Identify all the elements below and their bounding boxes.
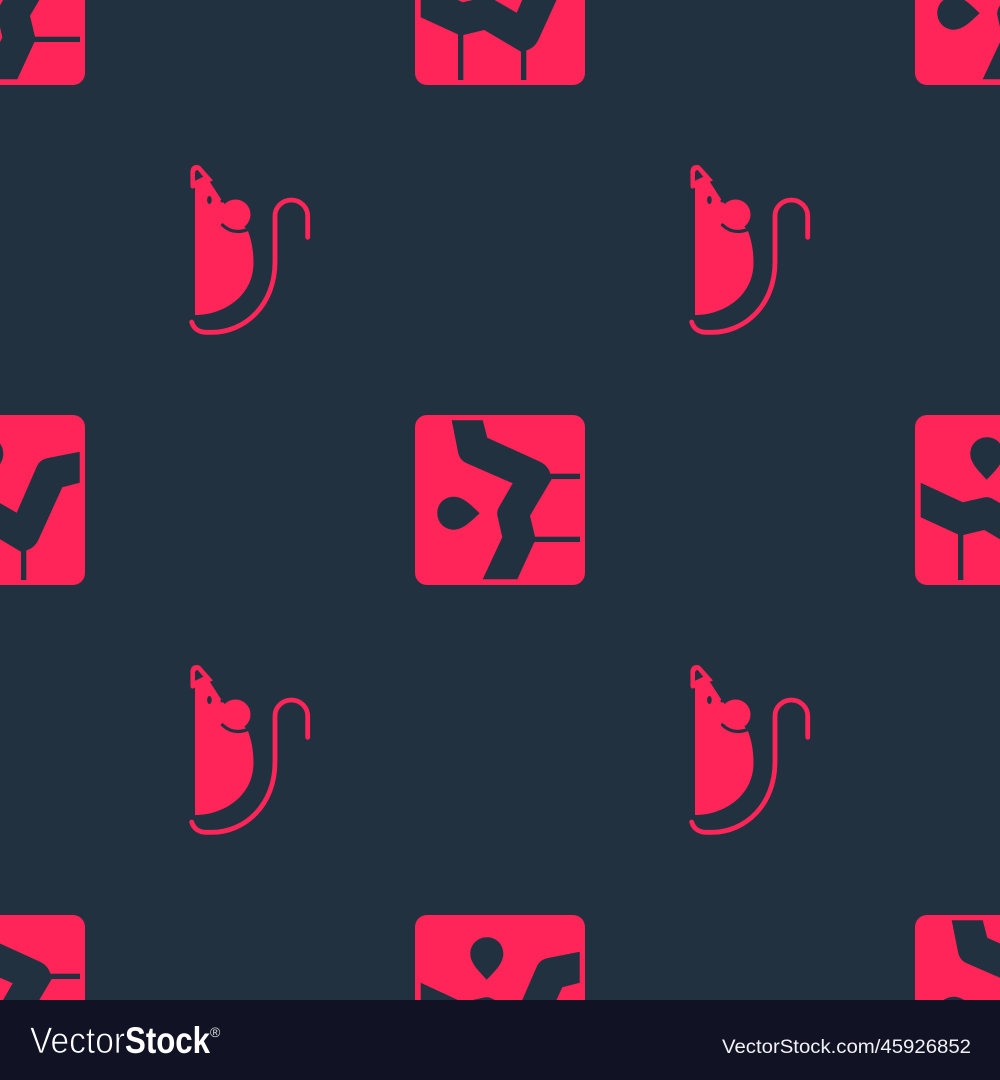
icon: road map tile middle right xyxy=(915,415,1000,585)
image id caption: VectorStock.com/45926852 xyxy=(722,1037,971,1058)
icon: road map tile bottom left xyxy=(0,915,85,1080)
icon: road map tile middle left xyxy=(0,415,85,585)
footer bar xyxy=(0,1000,1000,1080)
icon: mouse top left xyxy=(190,165,308,332)
logo wordmark xyxy=(30,1020,221,1061)
icon: road map tile top left xyxy=(0,0,85,85)
icon: mouse top right xyxy=(690,165,808,332)
icon: road map tile top right xyxy=(915,0,1000,85)
logo wordmark: Stock xyxy=(125,1020,210,1061)
logo wordmark: ® xyxy=(210,1024,221,1040)
icon: road map tile bottom right xyxy=(915,915,1000,1080)
icon: road map tile bottom center xyxy=(415,915,585,1080)
icon: mouse bottom left xyxy=(190,665,308,832)
icon: mouse bottom right xyxy=(690,665,808,832)
icon: road map tile top center xyxy=(415,0,585,85)
logo wordmark: Vector xyxy=(30,1020,125,1061)
icon: road map tile center xyxy=(415,415,585,585)
